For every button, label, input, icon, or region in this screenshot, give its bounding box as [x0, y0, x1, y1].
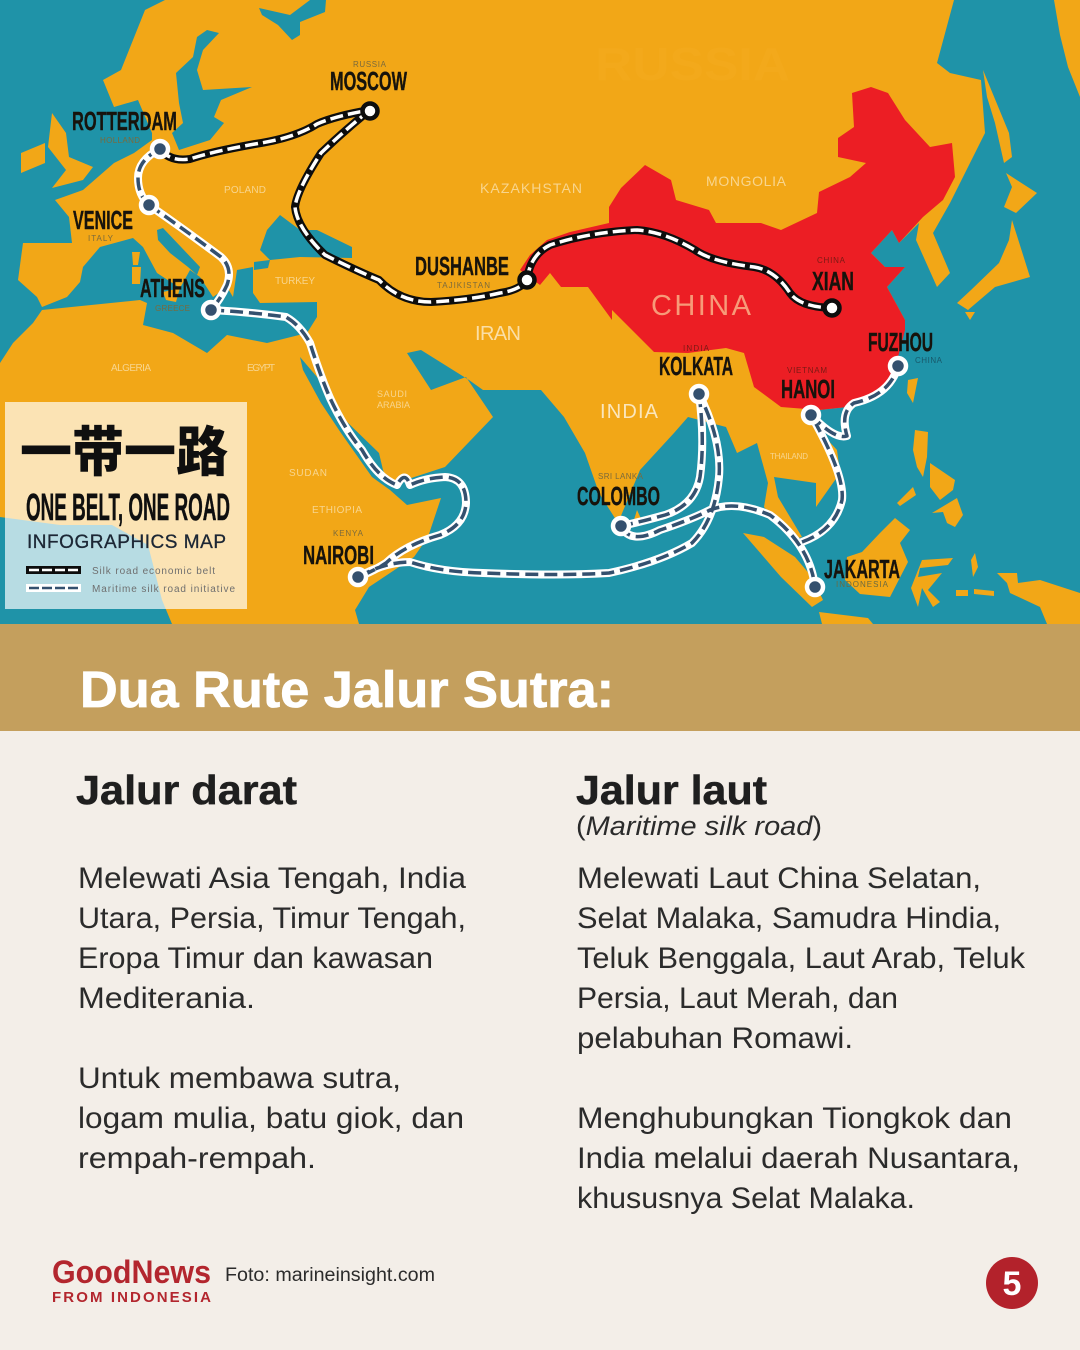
country labels: ALGERIA — [111, 363, 151, 374]
page number badge — [986, 1257, 1038, 1309]
city labels: KOLKATA — [659, 351, 733, 381]
land: Maluku — [956, 553, 994, 596]
land base — [0, 0, 1080, 624]
legend title: Chinese: 一带一路 — [20, 423, 228, 483]
small country captions: TAJIKISTAN — [437, 281, 490, 290]
legend key: maritime — [26, 584, 235, 595]
column: sea route — [576, 767, 1026, 1215]
small country captions: CHINA — [915, 356, 943, 365]
heading: land route: Jalur darat — [76, 767, 297, 813]
city labels: HANOI — [781, 374, 835, 404]
title band — [0, 624, 1080, 731]
city labels: DUSHANBE — [415, 251, 509, 281]
city labels: ATHENS — [140, 273, 205, 303]
small country captions: RUSSIA — [353, 60, 387, 69]
legend background — [5, 402, 247, 609]
column: land route — [76, 767, 466, 1175]
city labels: ROTTERDAM — [72, 106, 177, 136]
title: Dua Rute Jalur Sutra: — [80, 661, 614, 718]
map panel — [0, 0, 1080, 624]
logo: GoodNews from Indonesia — [52, 1254, 211, 1306]
country labels: EGYPT — [247, 363, 275, 374]
legend key: silk road: Silk road economic belt — [92, 566, 215, 577]
legend key: silk road — [26, 566, 215, 577]
sea route paragraph 2 — [577, 1102, 1020, 1215]
country labels: KAZAKHSTAN — [480, 180, 582, 196]
land route paragraph 1: Eropa Timur dan kawasan — [78, 942, 433, 975]
country labels — [111, 38, 808, 516]
sea: Red Sea, Indian Ocean and Pacific — [300, 0, 1080, 624]
country labels: SAUDI — [377, 389, 407, 399]
sea: Atlantic and Mediterranean — [0, 0, 317, 363]
land route paragraph 2: rempah-rempah. — [78, 1142, 316, 1175]
land: Borneo — [845, 518, 910, 597]
small country captions: GREECE — [155, 304, 190, 313]
maritime city markers — [141, 141, 906, 595]
country labels: TURKEY — [275, 276, 315, 287]
legend key: maritime: Maritime silk road initiative — [92, 584, 235, 595]
land route paragraph 2: logam mulia, batu giok, dan — [78, 1102, 464, 1135]
small country captions: SRI LANKA — [598, 472, 644, 481]
land: Mediterranean islands — [132, 252, 180, 302]
silk road city markers — [362, 104, 840, 316]
land: Sumatra — [743, 533, 823, 607]
sea route paragraph 2: Menghubungkan Tiongkok dan — [577, 1102, 1012, 1135]
country labels: ARABIA — [377, 400, 410, 410]
land: Sakhalin and Japan — [957, 70, 1037, 320]
sea route subtitle: (Maritime silk road ) — [576, 811, 822, 841]
country labels: MONGOLIA — [706, 173, 787, 189]
small country captions: CHINA — [817, 256, 846, 265]
city labels: JAKARTA — [824, 554, 900, 584]
silk road route casing — [160, 110, 832, 308]
sea route paragraph 1: Melewati Laut China Selatan, — [577, 862, 981, 895]
legend panel — [5, 402, 247, 609]
small country captions — [88, 60, 943, 589]
sea route paragraph 2: India melalui daerah Nusantara, — [577, 1142, 1020, 1175]
small country captions: INDONESIA — [836, 580, 889, 589]
small country captions: KENYA — [333, 529, 364, 538]
country labels: INDIA — [600, 401, 659, 423]
land: British Isles — [21, 113, 93, 188]
sea: West Africa coast — [0, 517, 172, 624]
country labels: POLAND — [224, 185, 266, 196]
country labels: CHINA — [651, 290, 752, 322]
land: Java — [819, 612, 873, 624]
land route paragraph 1: Mediterania. — [78, 982, 255, 1015]
land route paragraph 1: Utara, Persia, Timur Tengah, — [78, 902, 466, 935]
land: Sulawesi — [911, 558, 953, 607]
land: Philippines — [897, 430, 963, 527]
photo credit: Foto: marineinsight.com — [225, 1265, 435, 1286]
sea route paragraph 1 — [577, 862, 1026, 1055]
legend subtitle: INFOGRAPHICS MAP — [27, 532, 226, 553]
small country captions: ITALY — [88, 234, 114, 243]
sea: Baltic — [172, 30, 252, 150]
country labels: THAILAND — [770, 452, 808, 461]
land route paragraph 2: Untuk membawa sutra, — [78, 1062, 401, 1095]
heading: sea route: Jalur laut — [576, 767, 767, 813]
sea: Marmara — [254, 260, 270, 270]
land: China — [520, 87, 955, 410]
maritime route casing — [138, 149, 898, 587]
country labels: SUDAN — [289, 468, 327, 479]
city labels: VENICE — [73, 205, 133, 235]
silk road route dashes — [160, 110, 832, 308]
country labels: RUSSIA — [595, 38, 790, 90]
logo: GoodNews from Indonesia: FROM INDONESIA — [52, 1289, 211, 1306]
sea route paragraph 1: pelabuhan Romawi. — [577, 1022, 853, 1055]
small country captions: HOLLAND — [100, 136, 140, 145]
sea: Adriatic — [157, 228, 200, 275]
land route paragraph 1 — [78, 862, 466, 1015]
small country captions: VIETNAM — [787, 366, 827, 375]
city labels: COLOMBO — [577, 481, 660, 511]
maritime route dashes — [138, 149, 898, 587]
city labels: MOSCOW — [330, 66, 407, 96]
sea route paragraph 1: Persia, Laut Merah, dan — [577, 982, 898, 1015]
logo: GoodNews from Indonesia: GoodNews — [52, 1254, 211, 1290]
country labels: IRAN — [475, 323, 521, 345]
land: New Guinea — [997, 573, 1080, 624]
sea route paragraph 2: khususnya Selat Malaka. — [577, 1182, 915, 1215]
city labels: FUZHOU — [868, 327, 933, 357]
city labels: NAIROBI — [303, 540, 374, 570]
page number badge: 5 — [1003, 1265, 1021, 1303]
land: Sri Lanka — [633, 510, 643, 523]
land route paragraph 2 — [78, 1062, 464, 1175]
sea: Black Sea — [260, 215, 352, 260]
legend panel: ONE BELT, ONE ROAD — [26, 487, 230, 529]
land route paragraph 1: Melewati Asia Tengah, India — [78, 862, 466, 895]
city labels — [72, 66, 933, 584]
city labels: XIAN — [812, 266, 854, 296]
country labels: ETHIOPIA — [312, 505, 362, 516]
sea route paragraph 1: Teluk Benggala, Laut Arab, Teluk — [577, 942, 1026, 975]
land: Taiwan — [907, 378, 918, 403]
small country captions: INDIA — [683, 344, 710, 353]
sea route paragraph 1: Selat Malaka, Samudra Hindia, — [577, 902, 1001, 935]
sea: White Sea — [259, 0, 326, 40]
